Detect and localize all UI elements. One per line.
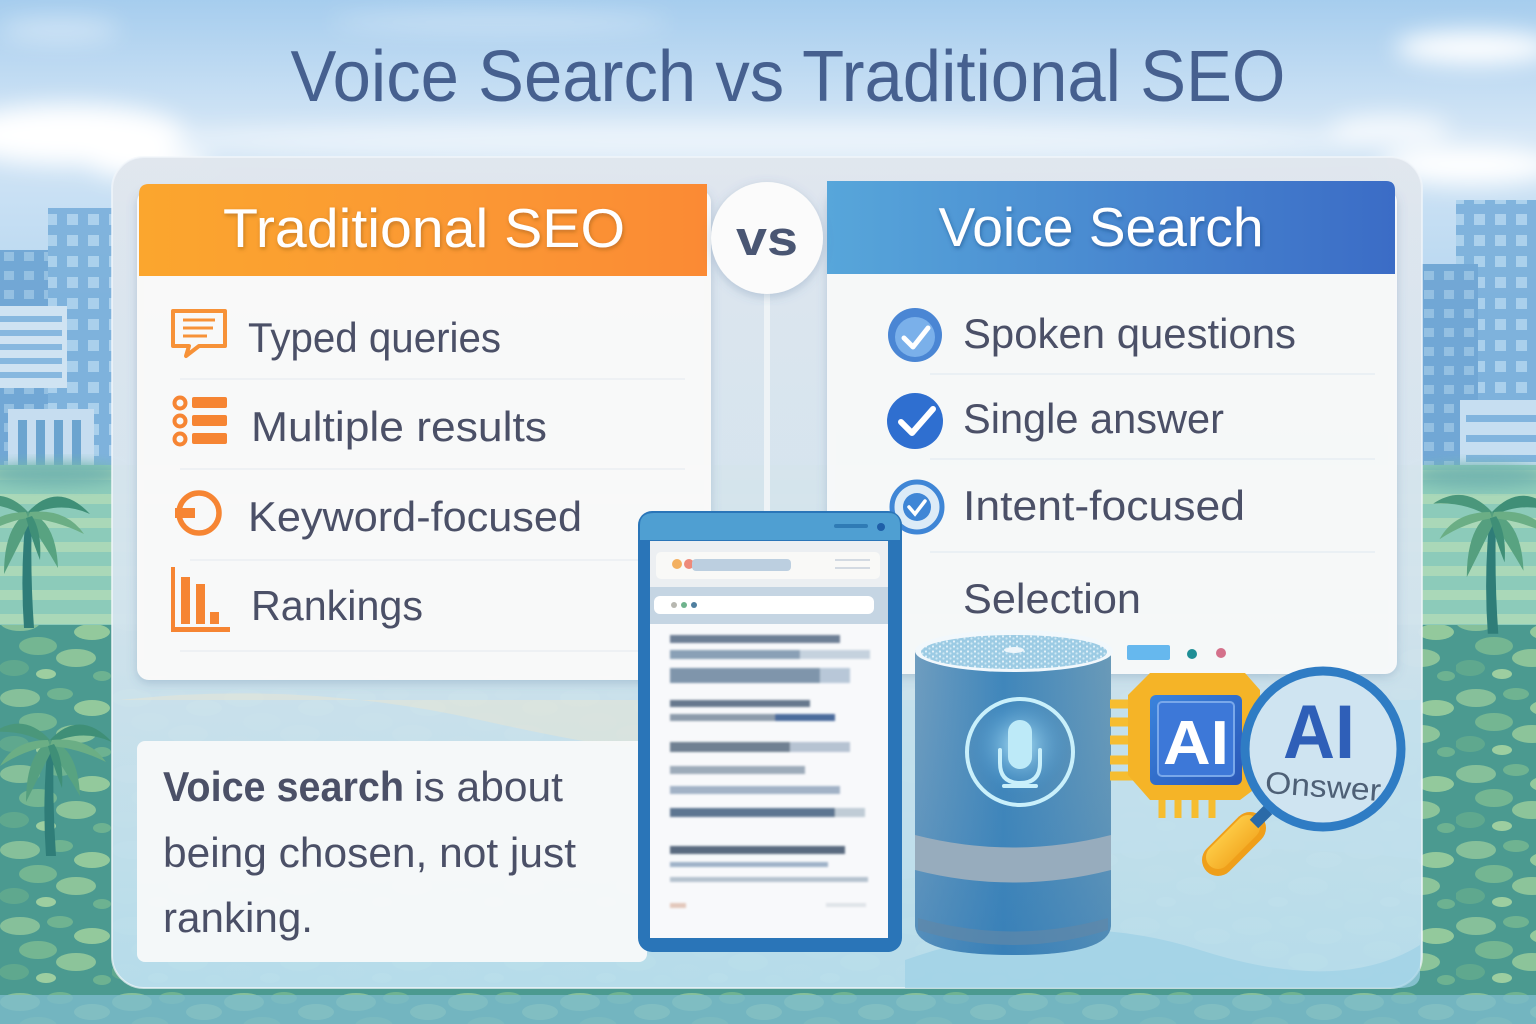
connector line: [764, 290, 770, 515]
badge: vs: vs: [736, 212, 798, 266]
text: multiple results: Multiple results: [251, 403, 547, 450]
text: rankings: Rankings: [251, 582, 423, 629]
illustration: smart speaker: [915, 630, 1113, 955]
icon: check 3: [892, 482, 942, 532]
heading: traditional SEO: Traditional SEO: [223, 197, 625, 259]
illustration: AI chip: [1110, 645, 1260, 818]
text: selection: Selection: [963, 575, 1141, 622]
illustration: magnifier AI answer: [1218, 671, 1401, 860]
callout: summary: ranking.: [163, 894, 313, 941]
callout: summary: [137, 741, 647, 962]
icon: chat bubble: [173, 311, 225, 356]
icon: refresh circle: [175, 493, 219, 533]
heading: traditional SEO: [139, 184, 707, 276]
heading: voice search: [827, 181, 1395, 274]
illustration: magnifier AI answer: Onswer: [1264, 765, 1382, 808]
palm trees: [0, 495, 1536, 856]
callout: summary: Voice search: [163, 763, 404, 810]
icon: check 1: [888, 308, 942, 362]
illustration: magnifier AI answer: AI: [1283, 690, 1355, 775]
card body: [137, 190, 711, 680]
icon: bar chart: [171, 567, 230, 632]
badge: vs: [711, 182, 823, 294]
text: typed queries: Typed queries: [248, 314, 501, 361]
heading: voice search: Voice Search: [938, 196, 1264, 258]
panel: traditional SEO: [137, 184, 711, 680]
callout: summary: being chosen, not just: [163, 829, 576, 876]
callout: summary: is about: [414, 763, 563, 810]
card body: [827, 190, 1397, 674]
illustration: phone with search results: [638, 511, 902, 952]
text: keyword-focused: Keyword-focused: [248, 493, 582, 540]
icon: list: [174, 397, 227, 444]
text: spoken questions: Spoken questions: [963, 310, 1296, 357]
title: Voice Search vs Traditional SEO: [290, 37, 1286, 117]
main panel: [112, 157, 1422, 988]
text: single answer: Single answer: [963, 395, 1224, 442]
illustration: AI chip: AI: [1163, 709, 1229, 778]
icon: microphone: [967, 695, 1073, 805]
text: intent-focused: Intent-focused: [963, 482, 1245, 529]
panel: voice search: [827, 181, 1397, 674]
icon: check 2: [887, 393, 943, 449]
